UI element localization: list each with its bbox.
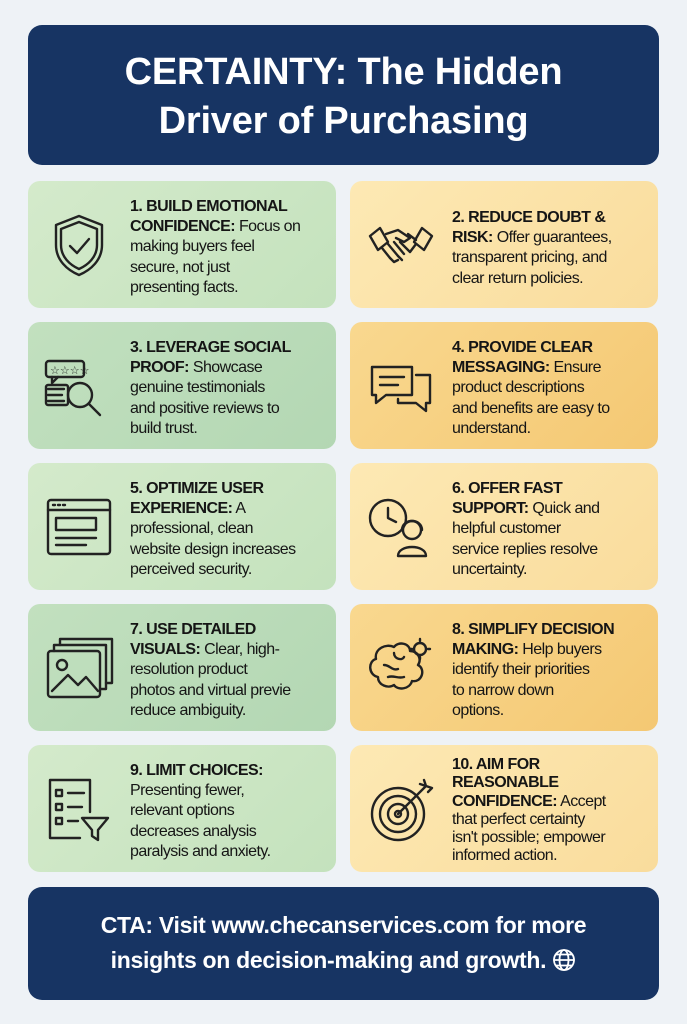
text: 7: VISUALS: Clear, high- bbox=[130, 641, 279, 658]
text: 5: perceived security. bbox=[130, 561, 252, 578]
panel: 1 build emotional confidence bbox=[28, 181, 336, 308]
text: 5: website design increases bbox=[130, 541, 296, 558]
text: 9: decreases analysis bbox=[130, 823, 256, 840]
text: 10: 10. AIM FOR bbox=[452, 756, 540, 773]
text: 10: that perfect certainty bbox=[452, 811, 585, 828]
text: 9: Presenting fewer, bbox=[130, 782, 244, 799]
text: 7: 7. USE DETAILED bbox=[130, 621, 256, 638]
text: 3: genuine testimonials bbox=[130, 379, 265, 396]
icon: reviews magnifier bbox=[44, 360, 102, 416]
icon: reviews magnifier: ☆☆☆☆ bbox=[50, 365, 90, 377]
text: 5 bbox=[130, 480, 296, 578]
cta banner: CTA: Visit www.checanservices.com for more bbox=[101, 912, 586, 938]
text: 4: 4. PROVIDE CLEAR bbox=[452, 339, 593, 356]
panel: 8 simplify decision bbox=[350, 604, 658, 731]
text: 2: 2. REDUCE DOUBT & bbox=[452, 209, 605, 226]
text: 1: 1. BUILD EMOTIONAL bbox=[130, 198, 287, 215]
text: 10: CONFIDENCE: Accept bbox=[452, 793, 606, 810]
text: 7: photos and virtual previe bbox=[130, 682, 291, 699]
icon: clock and agent bbox=[368, 498, 428, 558]
panel: 4 clear messaging bbox=[350, 322, 658, 449]
text: 7: resolution product bbox=[130, 661, 247, 678]
text: 7 bbox=[130, 621, 291, 719]
text: 9: 9. LIMIT CHOICES: bbox=[130, 762, 263, 779]
text: 6: uncertainty. bbox=[452, 561, 527, 578]
text: 5: EXPERIENCE: A bbox=[130, 500, 246, 517]
text: 2 bbox=[452, 209, 612, 287]
text: 9 bbox=[130, 762, 271, 860]
text: 6: helpful customer bbox=[452, 520, 561, 537]
text: 8: identify their priorities bbox=[452, 661, 589, 678]
text: 4 bbox=[452, 339, 610, 437]
text: 1 bbox=[130, 198, 300, 296]
text: 1: making buyers feel bbox=[130, 238, 254, 255]
panel: 6 fast support bbox=[350, 463, 658, 590]
text: 2: clear return policies. bbox=[452, 270, 583, 287]
text: 9: relevant options bbox=[130, 802, 234, 819]
text: 5: 5. OPTIMIZE USER bbox=[130, 480, 263, 497]
panel: 3 social proof bbox=[28, 322, 336, 449]
text: 6: SUPPORT: Quick and bbox=[452, 500, 600, 517]
text: 10 bbox=[452, 756, 606, 864]
text: 6: service replies resolve bbox=[452, 541, 598, 558]
text: 1: CONFIDENCE: Focus on bbox=[130, 218, 300, 235]
title bbox=[28, 25, 659, 165]
panel: 5 user experience bbox=[28, 463, 336, 590]
icon: shield check bbox=[54, 214, 104, 276]
text: 10: isn't possible; empower bbox=[452, 829, 605, 846]
text: 2: RISK: Offer guarantees, bbox=[452, 229, 612, 246]
text: 7: reduce ambiguity. bbox=[130, 702, 246, 719]
text: 3 bbox=[130, 339, 291, 437]
text: 5: professional, clean bbox=[130, 520, 253, 537]
text: 8: to narrow down bbox=[452, 682, 554, 699]
text: 6 bbox=[452, 480, 600, 578]
icon: stacked photos bbox=[46, 638, 114, 698]
text: 4: MESSAGING: Ensure bbox=[452, 359, 601, 376]
text: 8: options. bbox=[452, 702, 504, 719]
icon: handshake bbox=[368, 226, 434, 264]
icon: brain gear bbox=[369, 638, 432, 690]
text: 4: product descriptions bbox=[452, 379, 584, 396]
text: 6: 6. OFFER FAST bbox=[452, 480, 562, 497]
text: 4: and benefits are easy to bbox=[452, 400, 610, 417]
text: 9: paralysis and anxiety. bbox=[130, 843, 271, 860]
icon: list with funnel bbox=[48, 778, 110, 842]
text: 8: 8. SIMPLIFY DECISION bbox=[452, 621, 614, 638]
panel: 9 limit choices bbox=[28, 745, 336, 872]
text: 8: MAKING: Help buyers bbox=[452, 641, 602, 658]
text: 8 bbox=[452, 621, 614, 719]
icon: chat bubbles bbox=[370, 366, 432, 412]
text: 3: 3. LEVERAGE SOCIAL bbox=[130, 339, 291, 356]
text: 3: and positive reviews to bbox=[130, 400, 279, 417]
text: 10: REASONABLE bbox=[452, 774, 559, 791]
cta banner bbox=[28, 887, 659, 1000]
panel: 7 detailed visuals bbox=[28, 604, 336, 731]
cta banner: insights on decision-making and growth. bbox=[111, 947, 546, 973]
text: 1: secure, not just bbox=[130, 259, 230, 276]
text: 3: build trust. bbox=[130, 420, 197, 437]
text: 3: PROOF: Showcase bbox=[130, 359, 262, 376]
text: 4: understand. bbox=[452, 420, 530, 437]
panel: 10 reasonable confidence bbox=[350, 745, 658, 872]
title: Driver of Purchasing bbox=[159, 100, 528, 142]
text: 2: transparent pricing, and bbox=[452, 249, 607, 266]
icon: target bbox=[370, 778, 434, 842]
title: CERTAINTY: The Hidden bbox=[125, 51, 562, 93]
text: 10: informed action. bbox=[452, 847, 557, 864]
icon: browser window bbox=[46, 498, 112, 556]
panel: 2 reduce doubt bbox=[350, 181, 658, 308]
text: 1: presenting facts. bbox=[130, 279, 238, 296]
